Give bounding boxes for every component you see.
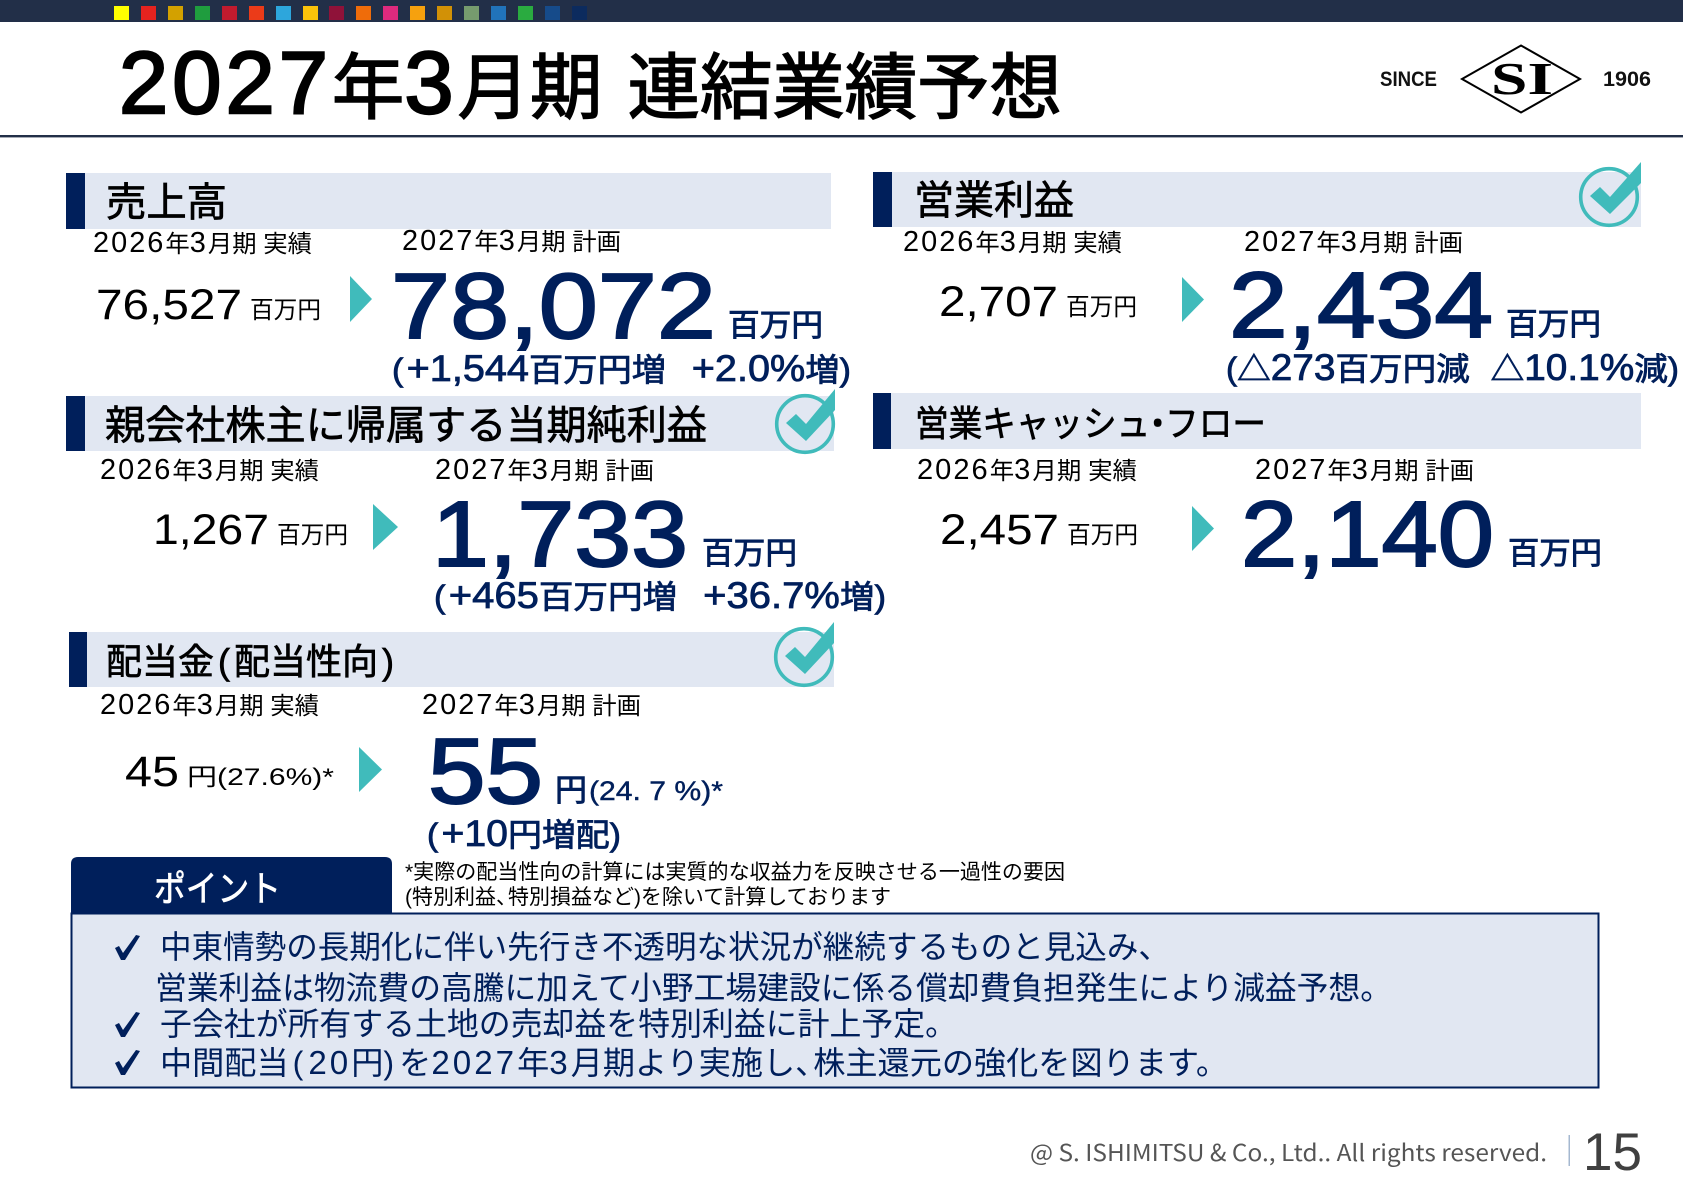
icon: tick 1 <box>115 935 140 960</box>
arrow <box>350 276 372 322</box>
label: plan: 2027年3月期 計画 <box>1244 226 1463 258</box>
footer copyright: @ S. ISHIMITSU & Co., Ltd.. All rights reserved. <box>1030 1134 1547 1168</box>
prior value: 2,457 <box>940 506 1059 554</box>
arrow <box>373 504 398 550</box>
tab: point <box>71 857 392 914</box>
prior value: 百万円 <box>1067 522 1138 549</box>
plan value <box>432 482 797 586</box>
prior value <box>96 281 321 329</box>
heading: operating profit: 営業利益 <box>914 179 1074 223</box>
heading: operating cash flow: 営業キャッシュ・フロー <box>915 403 1266 444</box>
plan value: 百万円 <box>728 308 823 343</box>
prior value: 百万円 <box>277 522 348 549</box>
prior value: 2,707 <box>939 278 1058 326</box>
heading: net income: 親会社株主に帰属する当期純利益 <box>105 404 707 448</box>
plan value: 78,072 <box>391 254 716 358</box>
arrow <box>1182 277 1204 322</box>
point 1 line 2: 営業利益は物流費の高騰に加えて小野工場建設に係る償却費負担発生により減益予想。 <box>155 970 1392 1006</box>
point 3: 中間配当(20円)を2027年3月期より実施し、株主還元の強化を図ります。 <box>160 1044 1228 1081</box>
label: prior actual: 2026年3月期 実績 <box>100 689 319 721</box>
plan value <box>1241 482 1602 586</box>
prior value: 百万円 <box>1066 294 1137 321</box>
footnote: (特別利益、特別損益など)を除いて計算しております <box>405 886 891 909</box>
panel: dividend <box>69 622 834 854</box>
plan value: 百万円 <box>702 536 797 571</box>
icon: check <box>1581 162 1641 225</box>
change note: (+10円増配) <box>427 813 621 854</box>
footnote <box>405 861 1065 909</box>
logo <box>1380 46 1651 112</box>
label: plan: 2027年3月期 計画 <box>435 454 654 486</box>
plan value: 百万円 <box>1506 307 1601 342</box>
points box <box>72 914 1598 1088</box>
logo: SI <box>1491 53 1553 104</box>
panel: operating profit <box>873 162 1679 388</box>
heading: dividend: 配当金(配当性向) <box>106 641 394 682</box>
label: plan: 2027年3月期 計画 <box>1255 454 1474 486</box>
panel: key points <box>71 857 1598 1088</box>
plan value: 円 <box>555 773 587 808</box>
top bar with colour squares <box>0 0 1683 22</box>
plan value <box>1229 253 1601 357</box>
heading: net sales: 売上高 <box>106 181 227 225</box>
page number: 15 <box>1583 1123 1642 1182</box>
logo: SINCE <box>1380 68 1437 91</box>
plan value: 1,733 <box>432 482 688 586</box>
icon: tick 3 <box>115 1050 140 1075</box>
prior value: 百万円 <box>250 297 321 324</box>
prior value: 76,527 <box>96 281 242 329</box>
plan value: 2,140 <box>1241 482 1494 586</box>
point 1 line 1: 中東情勢の長期化に伴い先行き不透明な状況が継続するものと見込み、 <box>160 929 1170 965</box>
prior value: 45 <box>125 748 179 796</box>
prior value <box>153 506 348 554</box>
label: plan: 2027年3月期 計画 <box>422 689 641 721</box>
panel: operating cash flow <box>873 393 1641 586</box>
label: prior actual: 2026年3月期 実績 <box>93 227 312 259</box>
point 2: 子会社が所有する土地の売却益を特別利益に計上予定。 <box>160 1006 957 1042</box>
panel: net sales <box>66 173 851 389</box>
prior value <box>940 506 1138 554</box>
plan value: 2,434 <box>1229 253 1493 357</box>
change note: (+465百万円増 +36.7% 増) <box>434 575 886 616</box>
label: prior actual: 2026年3月期 実績 <box>903 226 1122 258</box>
arrow <box>1192 506 1214 551</box>
plan value <box>428 719 724 823</box>
prior value <box>939 278 1137 326</box>
icon: check <box>777 389 835 452</box>
plan value: 百万円 <box>1508 536 1602 571</box>
title: 2027年3月期 連結業績予想 <box>119 33 1062 132</box>
prior value: 円(27.6%)* <box>187 764 334 791</box>
label: plan: 2027年3月期 計画 <box>402 225 621 257</box>
footnote: *実際の配当性向の計算には実質的な収益力を反映させる一過性の要因 <box>405 861 1065 884</box>
change note: (△273百万円減 △10.1%減) <box>1226 347 1679 388</box>
change note: (+1,544 百万円増 +2.0%増) <box>392 348 851 389</box>
logo: 1906 <box>1603 68 1651 91</box>
prior value <box>125 748 334 796</box>
label: prior actual: 2026年3月期 実績 <box>100 454 319 486</box>
plan value: (24. 7 %)* <box>589 776 724 806</box>
plan value <box>391 254 823 358</box>
panel: net income <box>66 389 886 616</box>
tab: point: ポイント <box>154 868 281 909</box>
icon: check <box>776 622 834 685</box>
prior value: 1,267 <box>153 506 269 554</box>
plan value: 55 <box>428 719 543 823</box>
icon: tick 2 <box>115 1012 140 1037</box>
arrow <box>359 747 382 792</box>
label: prior actual: 2026年3月期 実績 <box>917 454 1137 486</box>
